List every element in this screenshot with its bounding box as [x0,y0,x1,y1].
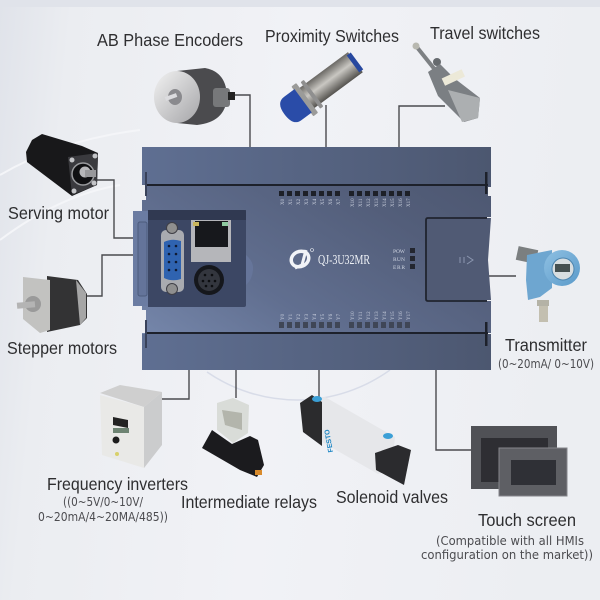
icon: solenoid valve: FESTO [324,428,335,453]
icon: encoder [154,68,235,125]
top LED labels: X13 [375,198,380,207]
top LED labels: X4 [313,198,318,205]
label: proximity switches: Proximity Switches [265,26,399,46]
mini-DIN port [194,265,224,295]
icon: servo motor [26,134,98,196]
right terminal door [426,218,491,301]
label: frequency inverters: ((0~5V/0~10V/ [63,494,144,509]
bottom LED labels: Y5 [321,313,326,320]
bottom LED labels: Y17 [407,311,412,320]
icon: solenoid valve [300,395,411,485]
top LED labels [281,198,412,207]
label: transmitter [498,335,594,371]
top LED labels: X1 [289,198,294,205]
status indicators: ERR [393,265,405,271]
label: solenoid valves: Solenoid valves [336,487,448,507]
label: stepper motors: Stepper motors [7,338,117,358]
top LED labels: X15 [391,198,396,207]
icon: intermediate relay [202,398,264,477]
bottom LED labels: Y11 [359,311,364,320]
label: serving motor: Serving motor [8,203,109,223]
label: transmitter: Transmitter [505,335,587,355]
bottom LED labels: Y16 [399,311,404,320]
bottom LED labels: Y13 [375,311,380,320]
label: encoders: AB Phase Encoders [97,30,243,50]
port bay door [133,210,253,307]
icon: pressure transmitter [516,246,580,322]
top LED labels: X5 [321,198,326,205]
label: frequency inverters [38,474,188,524]
top LED row [279,191,410,196]
status indicators [393,248,415,271]
label: travel switches: Travel switches [430,23,540,43]
bottom LED labels: Y3 [305,313,310,320]
bottom LED labels [281,311,412,320]
bottom LED labels: Y4 [313,313,318,320]
ethernet port [191,220,231,262]
label: touch screen: Touch screen [478,510,576,530]
label: frequency inverters: Frequency inverters [47,474,188,494]
icon: proximity switch [274,46,368,129]
icon: travel switch [412,42,480,122]
model name: QJ-3U32MR [318,253,370,268]
top LED labels: X11 [359,198,364,207]
PLC controller [133,147,491,370]
bottom LED labels: Y15 [391,311,396,320]
connector lines [86,95,516,450]
top LED labels: X3 [305,198,310,205]
top LED labels: X6 [329,198,334,205]
icon: stepper motor [17,276,87,333]
bottom LED row [279,322,410,328]
label: touch screen: (Compatible with all HMIs [436,533,584,548]
status indicators: RUN [393,257,405,263]
top LED labels: X17 [407,198,412,207]
bottom LED labels: Y0 [281,313,286,320]
icon: frequency inverter [100,385,162,468]
top LED labels: X10 [351,198,356,207]
icon: touch screens [471,426,567,496]
brand logo [289,248,314,270]
status indicators: POW [393,249,406,255]
PLC body [142,147,491,370]
label: intermediate relays: Intermediate relays [181,492,317,512]
mounting grooves [145,172,488,348]
label: touch screen [421,510,593,562]
bottom LED labels: Y14 [383,311,388,320]
top LED labels: X12 [367,198,372,207]
top LED labels: X0 [281,198,286,205]
bottom LED labels: Y7 [337,313,342,320]
bottom LED labels: Y10 [351,311,356,320]
bottom LED labels: Y1 [289,313,294,320]
top LED labels: X16 [399,198,404,207]
label: frequency inverters: 0~20mA/4~20MA/485)) [38,509,168,524]
bottom LED labels: Y2 [297,313,302,320]
top LED labels: X2 [297,198,302,205]
top LED labels: X14 [383,198,388,207]
bottom LED labels: Y6 [329,313,334,320]
top LED labels: X7 [337,198,342,205]
bottom LED labels: Y12 [367,311,372,320]
DB9 serial port [161,222,184,294]
